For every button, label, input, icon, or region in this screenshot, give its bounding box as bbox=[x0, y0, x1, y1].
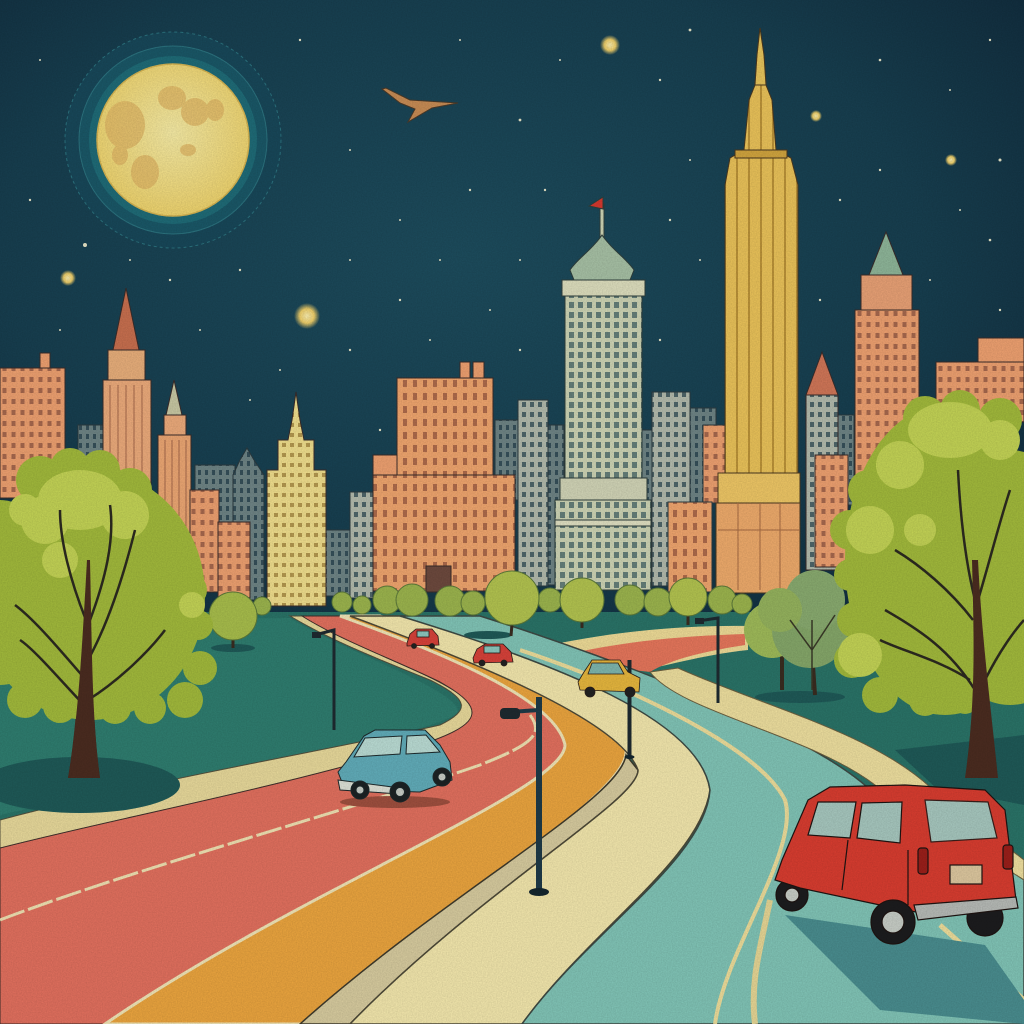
left grass bbox=[0, 618, 458, 815]
right grass bbox=[680, 650, 1024, 800]
building: far left block bbox=[0, 353, 65, 498]
car: small red far bbox=[407, 629, 439, 648]
night sky background bbox=[0, 0, 1024, 640]
tower: left spire bbox=[103, 288, 151, 495]
road: orange lane bbox=[105, 616, 626, 1024]
lamp post: middle bbox=[624, 660, 634, 759]
icon: plane bbox=[382, 88, 458, 122]
gray tall building bbox=[518, 400, 548, 586]
tree: right mid bbox=[744, 570, 848, 695]
tower: second spire bbox=[158, 380, 191, 553]
tower: right orange with green dome bbox=[855, 232, 919, 505]
road: far back red and cream bbox=[520, 626, 748, 672]
shadows on ground bbox=[0, 631, 1024, 813]
gray and orange mid buildings bbox=[652, 392, 725, 592]
trees mid row bbox=[209, 571, 707, 648]
building: large orange block bbox=[373, 362, 515, 592]
lamp post: left far bbox=[312, 630, 334, 730]
tree: large left bbox=[0, 448, 217, 778]
skyline back row bbox=[78, 408, 854, 600]
gray building bbox=[350, 492, 373, 598]
road: red lanes bbox=[0, 616, 565, 1024]
building: yellow stepped tower bbox=[267, 392, 326, 606]
road: stone curb bbox=[300, 755, 638, 1024]
stars bbox=[29, 29, 1002, 431]
car: yellow taxi bbox=[578, 660, 640, 697]
building: far right bbox=[936, 338, 1024, 422]
car: small red middle bbox=[473, 644, 513, 666]
building: central pale tower bbox=[555, 197, 651, 590]
right cream edge bbox=[650, 668, 1024, 880]
road: cream lane bbox=[350, 616, 710, 1024]
orange low buildings left bbox=[190, 490, 250, 598]
road: left cream curb bbox=[0, 616, 478, 852]
car: large red bbox=[775, 785, 1024, 1024]
road: lane line on red bbox=[0, 715, 536, 920]
glowing orbs bbox=[60, 35, 957, 329]
car: blue bbox=[338, 730, 452, 808]
back tree row bbox=[253, 584, 752, 616]
moon with halo bbox=[65, 32, 281, 248]
road: teal lanes bbox=[400, 616, 1024, 1024]
tree: large right bbox=[830, 390, 1024, 778]
tower: golden skyscraper bbox=[716, 28, 800, 593]
tower: right gray with red spire bbox=[806, 352, 848, 570]
lamp post: front centre bbox=[500, 697, 549, 896]
ground bbox=[0, 612, 1024, 1024]
lamp post: back bbox=[695, 618, 718, 703]
